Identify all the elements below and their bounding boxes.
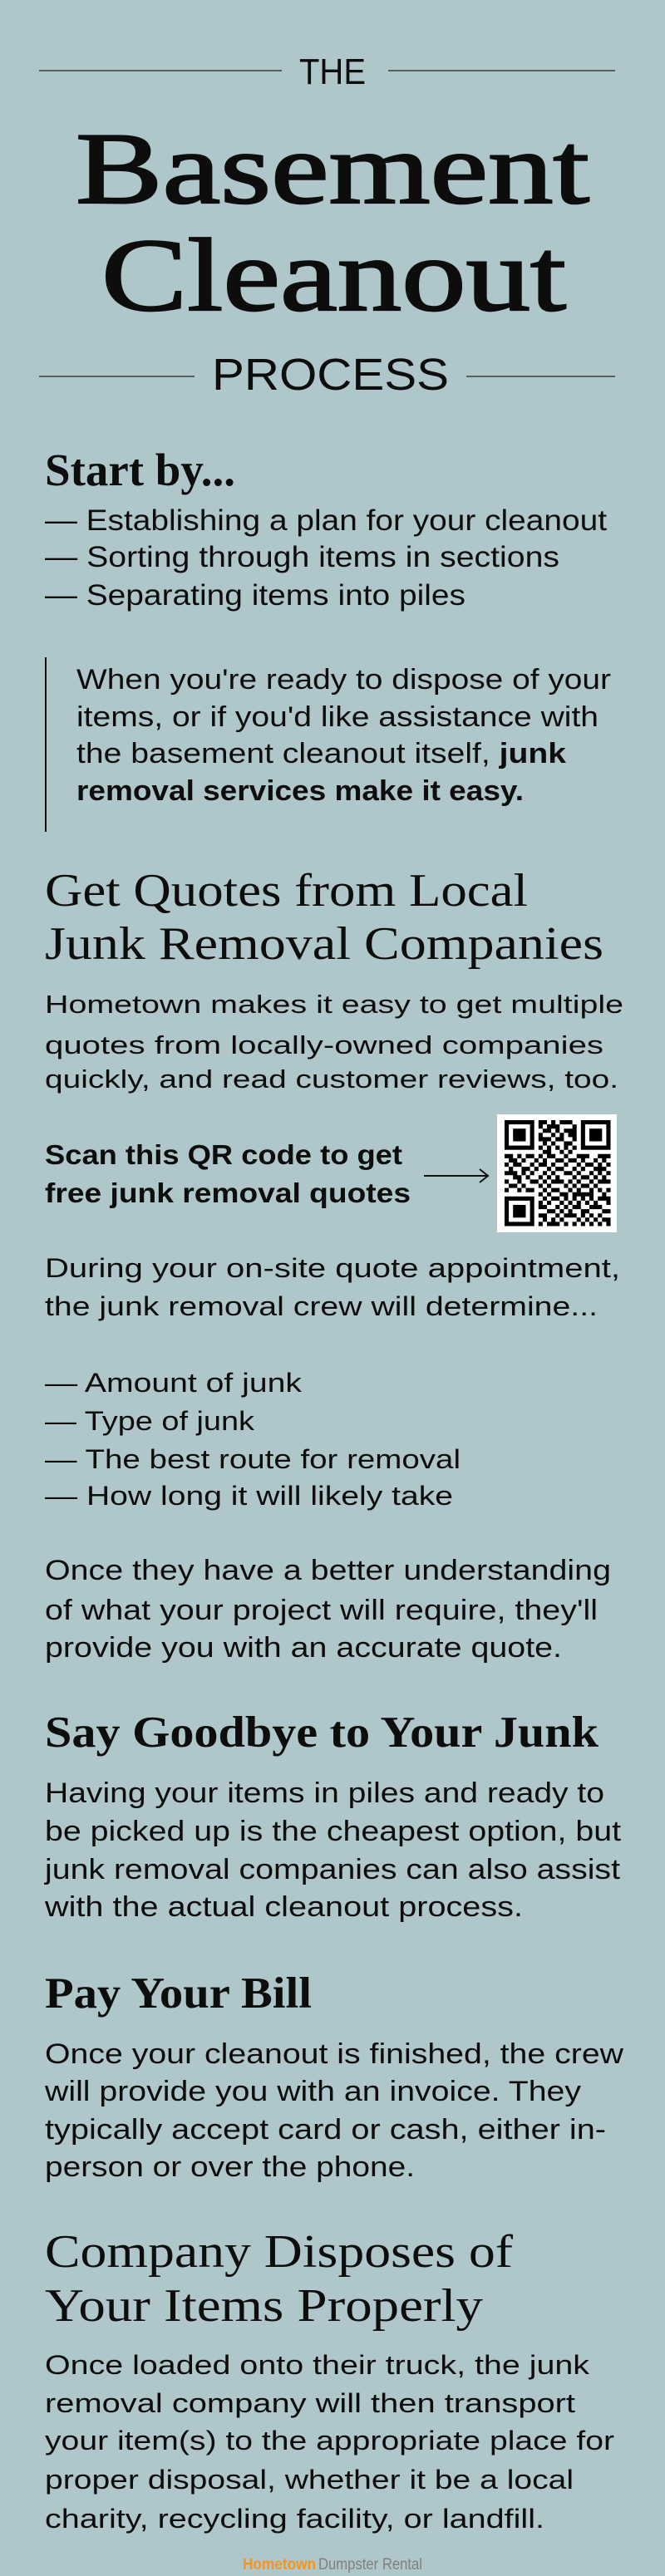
- section: company disposes: [45, 2226, 614, 2534]
- footer: logo: Hometown: [243, 2556, 316, 2574]
- list: crew determines: — How long it will likely take: [45, 1481, 453, 1511]
- heading: company disposes: [45, 2226, 513, 2332]
- title: Basement: Basement: [76, 111, 589, 225]
- heading: get quotes: [45, 865, 603, 970]
- callout: junk removal services: When you're ready to dispose of your: [76, 664, 611, 696]
- text: goodbye body: [44, 1777, 622, 1923]
- footer: logo: Dumpster Rental: [318, 2556, 422, 2574]
- text: bill body: will provide you with an invoice. They: [44, 2076, 581, 2107]
- text: accurate quote: provide you with an accurate quote.: [45, 1632, 562, 1664]
- text: bill body: Once your cleanout is finished, the crew: [45, 2038, 624, 2070]
- arrow: to QR: [424, 1169, 488, 1182]
- heading: Start by: Start by...: [45, 445, 235, 495]
- text: scan QR prompt: [45, 1139, 411, 1208]
- text: accurate quote: Once they have a better understanding: [45, 1555, 611, 1586]
- list: start steps: — Establishing a plan for your cleanout: [45, 504, 607, 537]
- list: start steps: — Separating items into piles: [45, 579, 466, 612]
- text: on-site appointment: During your on-site quote appointment,: [45, 1253, 620, 1283]
- text: goodbye body: be picked up is the cheapest option, but: [45, 1816, 622, 1847]
- title: THE: THE: [299, 52, 366, 92]
- list: crew determines: — Type of junk: [45, 1406, 255, 1436]
- list: start steps: [45, 504, 607, 612]
- text: hometown intro: Hometown makes it easy to get multiple: [45, 990, 623, 1019]
- footer: logo: [243, 2556, 422, 2574]
- text: disposal body: [45, 2350, 614, 2534]
- list: start steps: — Sorting through items in sections: [45, 541, 559, 573]
- icon: QR code: [497, 1114, 617, 1232]
- title: PROCESS: PROCESS: [212, 350, 449, 400]
- text: hometown intro: quotes from locally-owned companies: [45, 1030, 603, 1059]
- text: on-site appointment: the junk removal crew will determine...: [45, 1291, 598, 1321]
- title: Cleanout: Cleanout: [101, 219, 566, 333]
- text: accurate quote: [45, 1555, 611, 1664]
- text: disposal body: Once loaded onto their truck, the junk: [45, 2350, 590, 2380]
- section: say goodbye: [44, 1708, 622, 1923]
- callout: junk removal services: the basement cleanout itself, junk: [76, 738, 566, 769]
- section: get quotes: [45, 865, 623, 1664]
- text: disposal body: charity, recycling facility, or landfill.: [45, 2504, 544, 2534]
- text: bill body: person or over the phone.: [45, 2151, 415, 2183]
- text: disposal body: your item(s) to the appropriate place for: [45, 2426, 614, 2456]
- text: goodbye body: junk removal companies can also assist: [44, 1854, 621, 1885]
- text: accurate quote: of what your project will require, they'll: [45, 1595, 598, 1626]
- heading: get quotes: Junk Removal Companies: [45, 918, 603, 970]
- heading: get quotes: Get Quotes from Local: [45, 865, 528, 917]
- heading: company disposes: Company Disposes of: [45, 2226, 513, 2278]
- list: crew determines: — Amount of junk: [45, 1368, 303, 1398]
- list: crew determines: [45, 1368, 461, 1511]
- heading: company disposes: Your Items Properly: [45, 2280, 483, 2332]
- text: scan QR prompt: free junk removal quotes: [45, 1177, 411, 1208]
- text: goodbye body: Having your items in piles and ready to: [45, 1777, 604, 1809]
- text: on-site appointment: [45, 1253, 620, 1321]
- text: disposal body: proper disposal, whether it be a local: [45, 2465, 574, 2495]
- list: crew determines: — The best route for removal: [45, 1444, 461, 1474]
- heading: say goodbye: Say Goodbye to Your Junk: [45, 1708, 599, 1757]
- callout: junk removal services: items, or if you'd like assistance with: [76, 701, 598, 733]
- text: hometown intro: quickly, and read customer reviews, too.: [45, 1064, 618, 1094]
- text: scan QR prompt: Scan this QR code to get: [45, 1139, 402, 1170]
- callout: junk removal services: [46, 657, 611, 832]
- text: bill body: typically accept card or cash, either in-: [45, 2114, 606, 2146]
- section: start by: [45, 445, 607, 612]
- text: hometown intro: [45, 990, 623, 1094]
- section: pay your bill: [44, 1969, 624, 2183]
- callout: junk removal services: removal services make it easy.: [76, 775, 524, 807]
- text: disposal body: removal company will then transport: [45, 2388, 575, 2418]
- heading: pay your bill: Pay Your Bill: [45, 1969, 312, 2018]
- text: goodbye body: with the actual cleanout process.: [44, 1891, 523, 1923]
- title block: [39, 52, 615, 400]
- text: bill body: [44, 2038, 624, 2183]
